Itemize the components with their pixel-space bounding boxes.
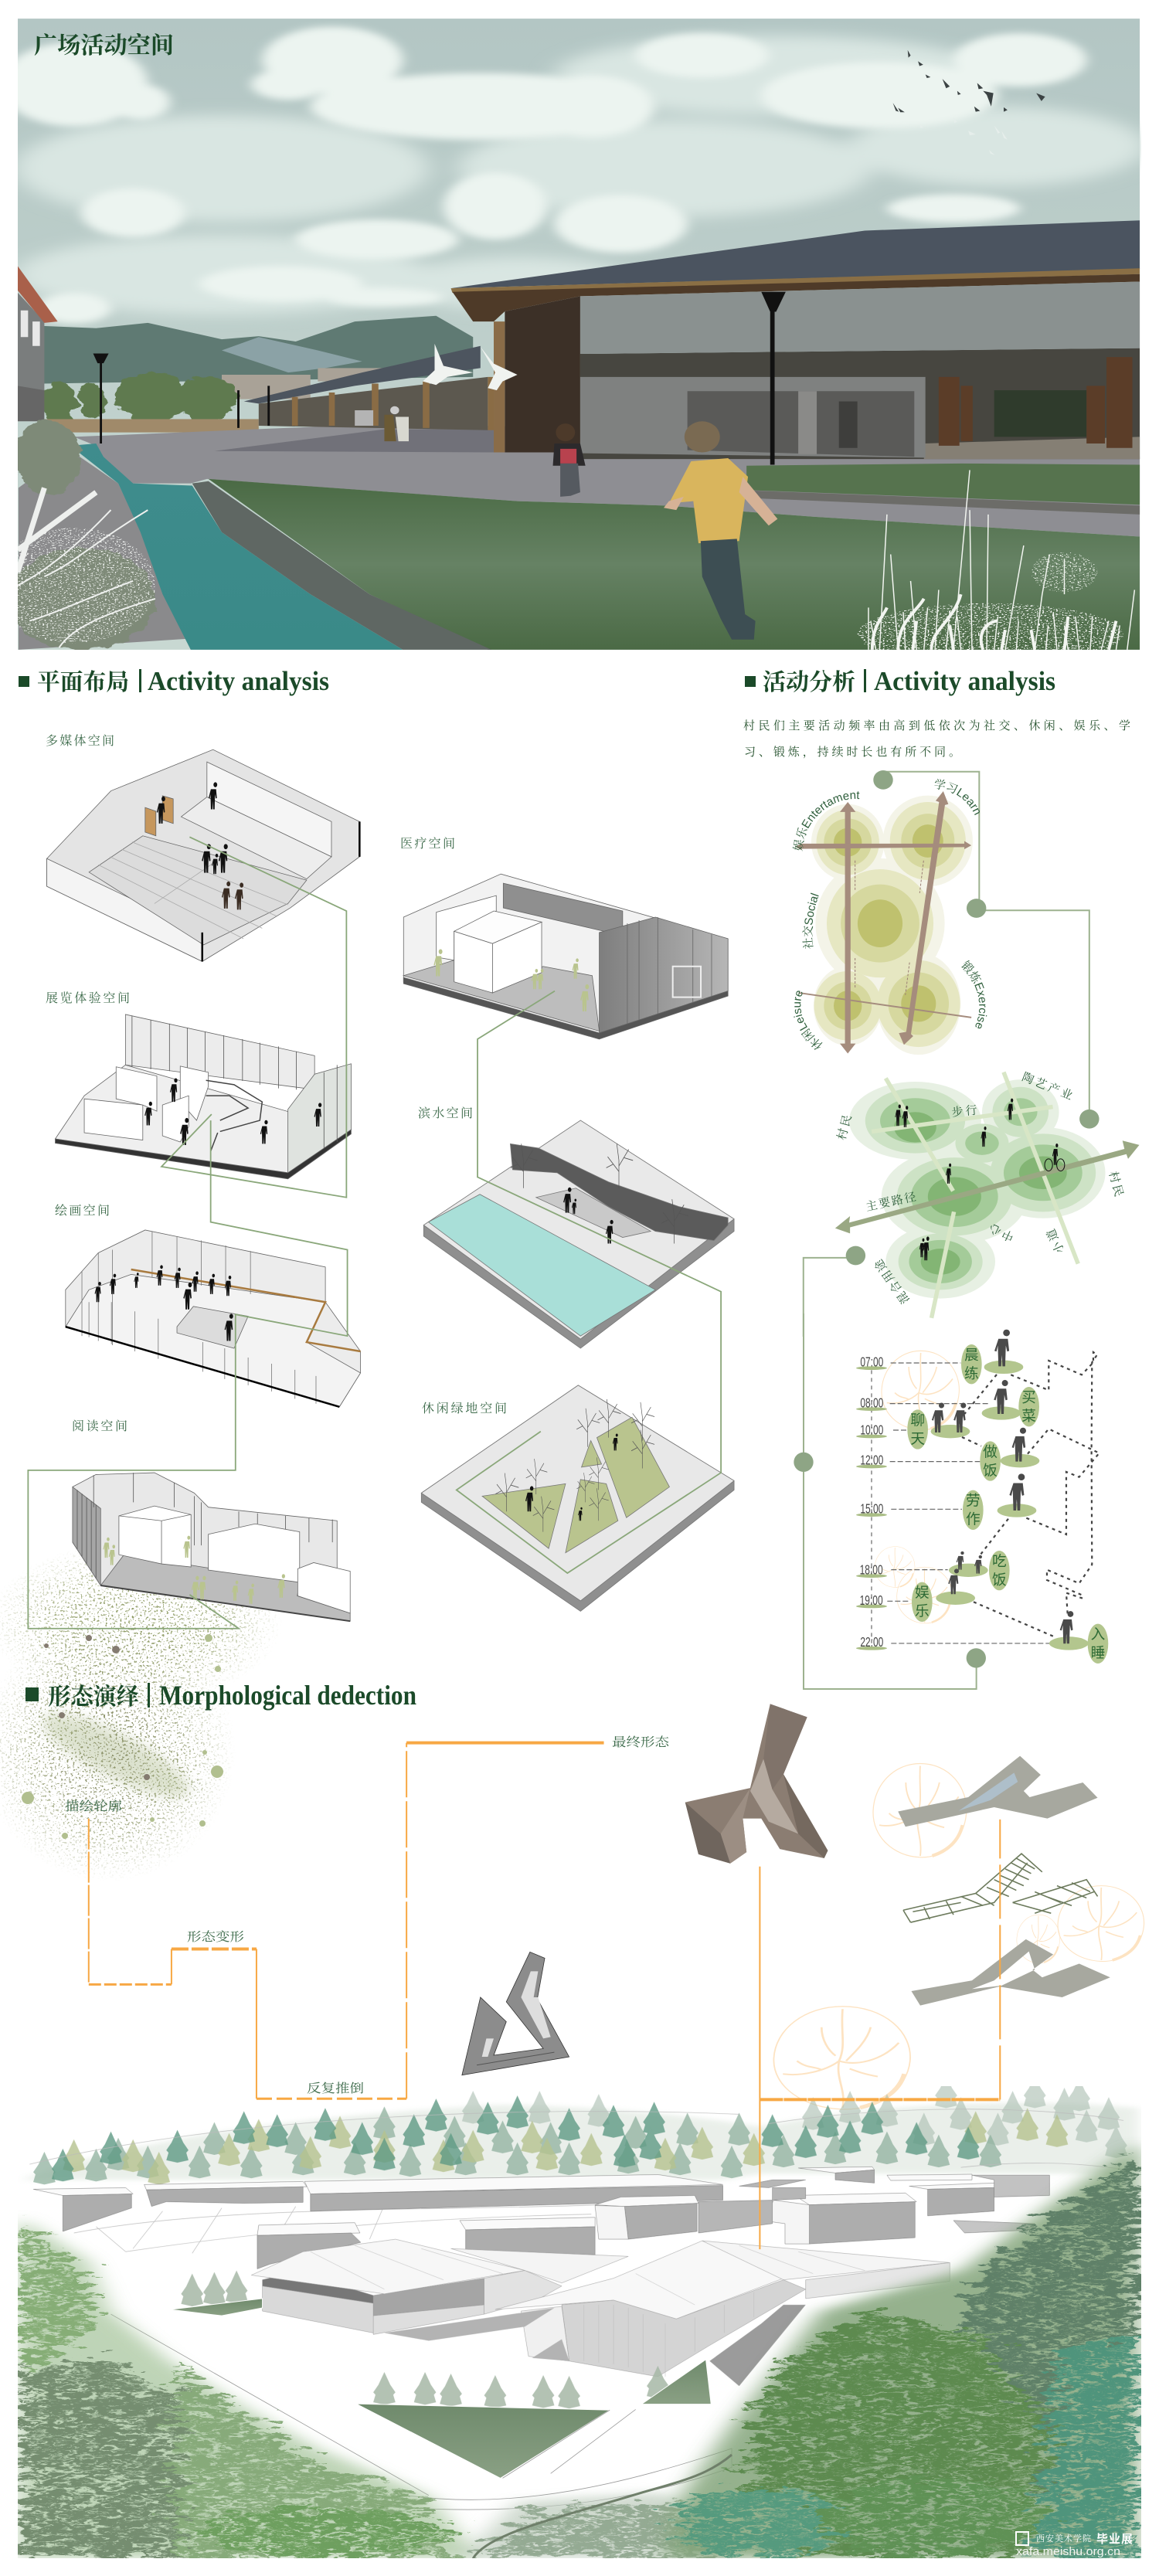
roof truss structure [903,1854,1098,1922]
main route arrow [835,1140,1140,1233]
distant trees and houses [42,368,384,433]
site edge lines [110,2314,732,2510]
heading: activity analysis: Activity analysis [874,666,1055,696]
activity ovals: 劳 [966,1493,981,1509]
process labels: 反复推倒 [307,2082,364,2095]
process labels: 形态变形 [187,1930,244,1944]
activity intro text [743,719,1130,759]
pale green path arrows [872,1072,1078,1318]
activity platforms [931,1361,1089,1650]
curved activity labels: 休闲Leisure [794,991,822,1050]
curved activity labels: 社交Social [802,893,819,949]
title: plaza activity space: 广场活动空间 [34,33,174,59]
top view form three [911,1939,1110,2006]
activity intro text: 习、锻炼，持续时长也有所不同。 [744,745,960,759]
curving path line [473,2455,732,2558]
time stamps: 22:00 [860,1634,883,1650]
faint tree outlines [773,1763,1144,2109]
curved activity labels: 陶艺产业 [1020,1070,1076,1103]
activity ovals: 练 [964,1365,979,1381]
time stamps [856,1354,887,1650]
activity intro text: 村民们主要活动频率由高到低依次为社交、休闲、娱乐、学 [743,719,1130,732]
time stamps: 15:00 [860,1500,883,1516]
main building [451,220,1140,459]
watermark: 毕业展 [1096,2533,1133,2546]
left house [18,266,58,421]
curved activity labels: 步行 [951,1103,980,1120]
time stamps: 19:00 [860,1592,883,1608]
waterfront space drawing [423,1120,734,1348]
heading: activity analysis: 活动分析 [763,670,855,695]
main building roofs and facades [251,2239,950,2377]
curved activity labels: 混合用途 [872,1256,913,1306]
people figures [932,1330,1073,1643]
top view form one [898,1756,1098,1827]
foreground trees left [19,2217,481,2558]
panel: plan layout axonometrics [28,749,734,1629]
space labels: 阅读空间 [72,1419,127,1433]
activity ovals: 吃 [992,1553,1007,1569]
ground plaza [74,426,1140,537]
curved activity labels: 主要路径 [865,1190,919,1214]
splatter texture [0,1541,282,1881]
heading: plan layout: Activity analysis [148,666,329,696]
heading: morphological deduction [25,1680,416,1711]
panel: aerial perspective [19,2075,1138,2558]
time stamps: 12:00 [860,1453,883,1468]
curved activity labels [793,779,1126,1306]
foreground trees bottom centre [458,2493,739,2558]
ground shadows [384,2305,806,2386]
curved activity labels: 中心 [985,1220,1016,1243]
panel: daily timeline [794,1313,1108,1689]
space labels: 医疗空间 [400,837,455,851]
sky and clouds [0,19,1146,650]
activity ovals: 晨 [964,1347,979,1363]
reading space drawing [73,1473,350,1621]
mountains [42,316,473,384]
activity ovals: 睡 [1091,1645,1105,1661]
panel: activity frequency diagram [795,770,1140,1337]
medical space drawing [403,874,728,1039]
curved activity labels: 村民 [1106,1170,1126,1200]
connector lines with nodes [804,770,1100,1337]
multimedia space drawing [47,749,359,961]
space labels: 休闲绿地空间 [422,1401,507,1415]
activity ovals: 娱 [915,1585,930,1601]
activity ovals: 买 [1021,1389,1036,1405]
process labels: 最终形态 [612,1735,670,1749]
heading: morphological deduction: Morphological dedection [159,1680,416,1711]
watermark [1016,2532,1133,2558]
curved activity labels: 村民 [835,1111,855,1141]
activity ovals: 聊 [910,1412,925,1428]
hero photo: plaza activity space [0,19,1146,665]
activity ovals [907,1344,1108,1664]
curved activity labels: 学习Learn [934,779,980,815]
leisure green space drawing [421,1385,734,1611]
time stamps: 07:00 [860,1354,883,1369]
space labels: 滨水空间 [418,1106,473,1120]
time stamps: 10:00 [860,1422,883,1438]
time dash leaders [887,1363,1049,1643]
space labels: 多媒体空间 [46,734,114,748]
dotted route [962,1352,1100,1637]
left shrubs and white tree [0,419,155,650]
foreground trees right [665,2143,1138,2558]
far long building [244,346,494,430]
heading: activity analysis [745,666,1055,696]
doves [423,344,518,390]
space labels [46,734,507,1433]
process labels: 描绘轮廓 [65,1799,122,1813]
olive bubbles [811,796,973,1055]
terrain mesh [29,2109,1131,2255]
green bubbles [849,1079,1106,1299]
activity ovals: 菜 [1021,1408,1036,1424]
activity ovals: 天 [910,1430,925,1446]
curved activity labels: 小道 [1044,1225,1067,1256]
final form massing [685,1704,828,1864]
sunken green courts [170,2299,711,2478]
activity ovals: 入 [1091,1626,1105,1643]
exhibition experience space drawing [55,1014,351,1179]
curved activity labels: 娱乐Entertament [793,791,859,851]
river [70,443,403,650]
street lamps [93,292,786,465]
context buildings [33,2166,1049,2269]
watermark: 西安美术学院 [1036,2533,1091,2544]
watermark: xafa.meishu.org.cn [1016,2545,1120,2558]
activity ovals: 饭 [992,1572,1007,1588]
lawns and curbs [192,464,1140,650]
activity ovals: 乐 [915,1603,930,1619]
activity ovals: 饭 [983,1462,998,1478]
people far [384,406,409,441]
running boy [664,421,777,640]
brown axis arrows [795,791,971,1053]
timeline axis [871,1370,872,1643]
space labels: 展览体验空间 [46,991,130,1005]
white reeds [858,470,1134,665]
reversal form [462,1952,569,2075]
connector line and nodes [794,1313,986,1689]
orange dashed process lines [89,1743,1000,2249]
green connector lines [28,837,721,1629]
heading: plan layout [19,666,329,696]
forest hillside [22,2075,1138,2184]
heading: plan layout: 平面布局 [37,670,129,695]
activity ovals: 作 [966,1511,981,1528]
activity ovals: 做 [983,1443,998,1460]
girl [553,423,586,497]
painting space drawing [66,1230,361,1407]
process labels [65,1735,670,2095]
time stamps: 18:00 [860,1562,883,1578]
curved activity labels: 锻炼Exercise [961,960,987,1029]
space labels: 绘画空间 [55,1204,110,1218]
time stamps: 08:00 [860,1395,883,1411]
heading: morphological deduction: 形态演绎 [48,1684,139,1710]
panel: morphological forms [462,1704,1144,2109]
courtyard pines [181,2271,669,2408]
flock of birds [893,50,1045,155]
people silhouettes [895,1099,1058,1260]
faint tree outlines [875,1351,959,1623]
